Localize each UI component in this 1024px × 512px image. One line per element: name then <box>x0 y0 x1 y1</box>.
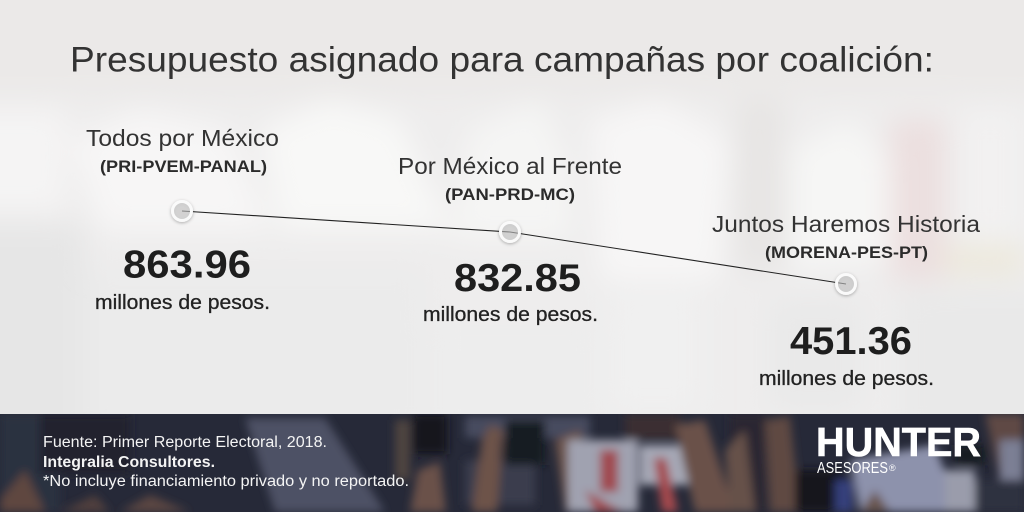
logo: Hunter Asesores: ASESORES <box>817 460 888 477</box>
marker <box>500 222 520 242</box>
source notes <box>43 434 409 490</box>
logo: Hunter Asesores: ® <box>889 463 896 473</box>
logo: Hunter Asesores: HUNTER <box>816 419 981 465</box>
source notes: *No incluye financiamiento privado y no reportado. <box>43 473 409 490</box>
marker <box>836 274 856 294</box>
panel: Todos por México <box>86 125 279 314</box>
coalition parties: (PRI-PVEM-PANAL) <box>100 157 267 176</box>
amount: 863.96 <box>123 244 251 286</box>
source notes: Fuente: Primer Reporte Electoral, 2018. <box>43 434 327 451</box>
coalition name: Por México al Frente <box>398 153 622 179</box>
amount: 451.36 <box>790 320 912 363</box>
panel: Juntos Haremos Historia <box>712 211 981 390</box>
title: Presupuesto asignado para campañas por coalición: <box>70 40 934 80</box>
unit: millones de pesos. <box>95 292 270 314</box>
coalition name: Juntos Haremos Historia <box>712 211 981 237</box>
marker <box>172 202 192 220</box>
coalition parties: (PAN-PRD-MC) <box>445 185 575 204</box>
source notes: Integralia Consultores. <box>43 454 215 471</box>
background photo: faded campaign rally <box>98 110 1020 282</box>
panel: Por México al Frente <box>398 153 622 326</box>
line connecting coalition markers <box>182 211 846 284</box>
amount: 832.85 <box>454 257 581 300</box>
unit: millones de pesos. <box>759 368 934 390</box>
coalition parties: (MORENA-PES-PT) <box>765 243 928 262</box>
background photo: dark footer crowd <box>0 414 1024 512</box>
coalition name: Todos por México <box>86 125 279 151</box>
unit: millones de pesos. <box>423 304 598 326</box>
